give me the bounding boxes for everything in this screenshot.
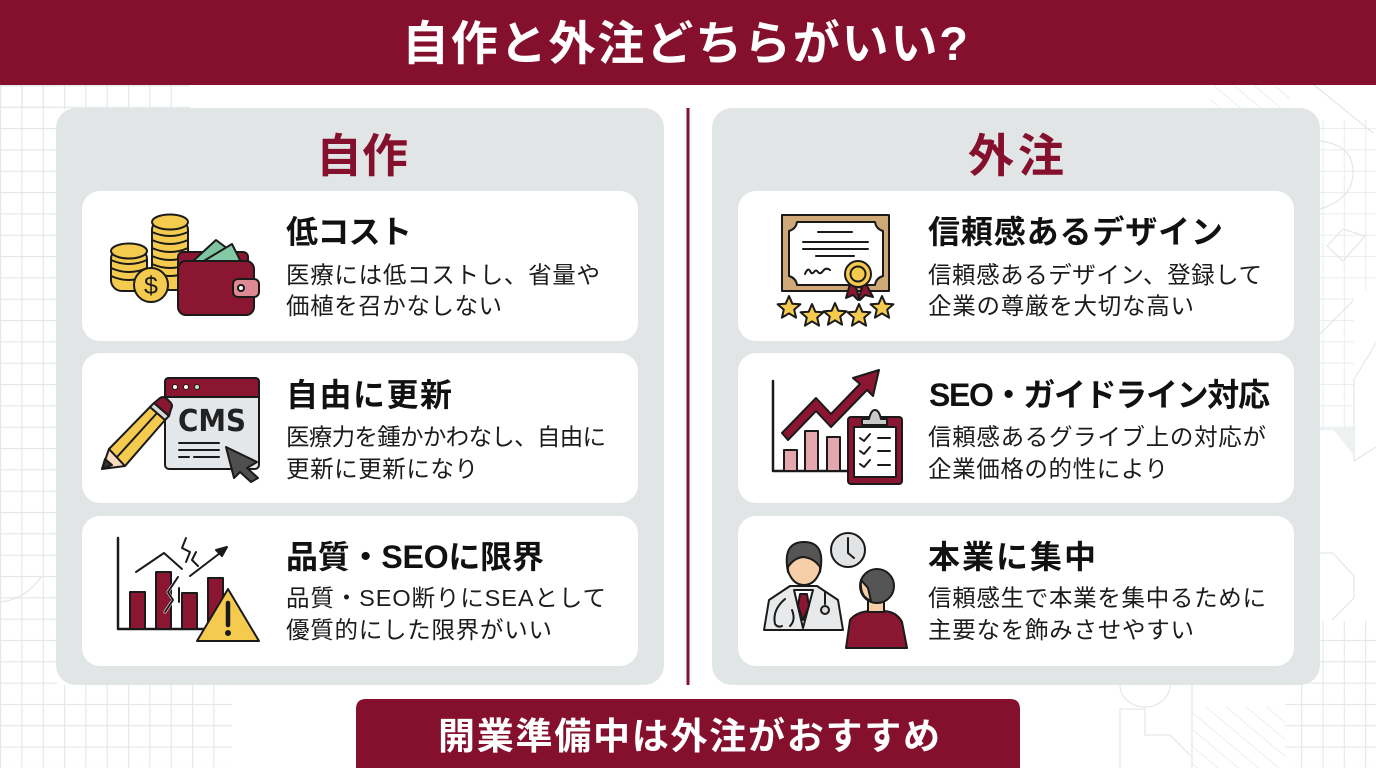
icon: coins and wallet xyxy=(111,214,259,315)
card text: 更新に更新になり xyxy=(286,456,478,482)
card text xyxy=(286,585,606,643)
card text xyxy=(286,262,600,319)
icon: CMS window and pencil xyxy=(102,378,259,482)
icon: CMS window and pencil: CMS xyxy=(178,404,246,439)
card text: 企業の尊厳を大切な高い xyxy=(928,293,1194,319)
card text: 医療力を鍾かかわなし、自由に xyxy=(286,424,606,450)
card text: 信頼感あるデザイン、登録して xyxy=(928,262,1262,288)
card: 信頼感あるデザイン xyxy=(738,191,1294,341)
card: 品質・SEOに限界 xyxy=(82,516,638,666)
icon: broken chart and warning xyxy=(118,538,259,641)
card text: 医療には低コストし、省量や xyxy=(286,262,600,288)
icon: doctor, clock and patient xyxy=(764,533,907,648)
card: SEO・ガイドライン対応 xyxy=(738,353,1294,503)
divider xyxy=(686,108,690,685)
conclusion banner xyxy=(356,699,1020,768)
card title: SEO・ガイドライン対応 xyxy=(929,377,1270,413)
card text: 信頼感あるグライブ上の対応が xyxy=(928,424,1266,450)
card text xyxy=(928,585,1266,643)
card: 本業に集中 xyxy=(738,516,1294,666)
card text xyxy=(928,262,1262,319)
card title: 品質・SEOに限界 xyxy=(286,539,544,575)
icon: certificate and stars xyxy=(778,215,893,326)
card text: 価植を召かなしない xyxy=(286,293,502,319)
card text xyxy=(286,424,606,482)
icon: coins and wallet: $ xyxy=(144,272,158,300)
card text: 主要なを飾みさせやすい xyxy=(928,617,1194,643)
panel: 外注 xyxy=(712,108,1320,685)
card text: 品質・SEO断りにSEAとして xyxy=(286,585,606,611)
icon: growth chart and checklist xyxy=(773,370,902,484)
heading: 自作: 自作 xyxy=(316,130,408,182)
title: 自作と外注どちらがいい? xyxy=(402,17,968,70)
card title: 信頼感あるデザイン xyxy=(928,214,1223,250)
heading: 外注: 外注 xyxy=(968,130,1064,182)
card title: 低コスト xyxy=(286,214,412,250)
panel: 自作 xyxy=(56,108,664,685)
card text xyxy=(928,424,1266,482)
banner text: 開業準備中は外注がおすすめ xyxy=(438,716,940,757)
card title: 本業に集中 xyxy=(928,539,1096,575)
card text: 信頼感生で本業を集中るために xyxy=(928,585,1266,611)
card title: 自由に更新 xyxy=(286,377,452,413)
card text: 企業価格の的性により xyxy=(928,456,1168,482)
title bar xyxy=(0,0,1376,85)
card text: 優質的にした限界がいい xyxy=(286,617,552,643)
card: 低コスト xyxy=(82,191,638,341)
card: 自由に更新 xyxy=(82,353,638,503)
